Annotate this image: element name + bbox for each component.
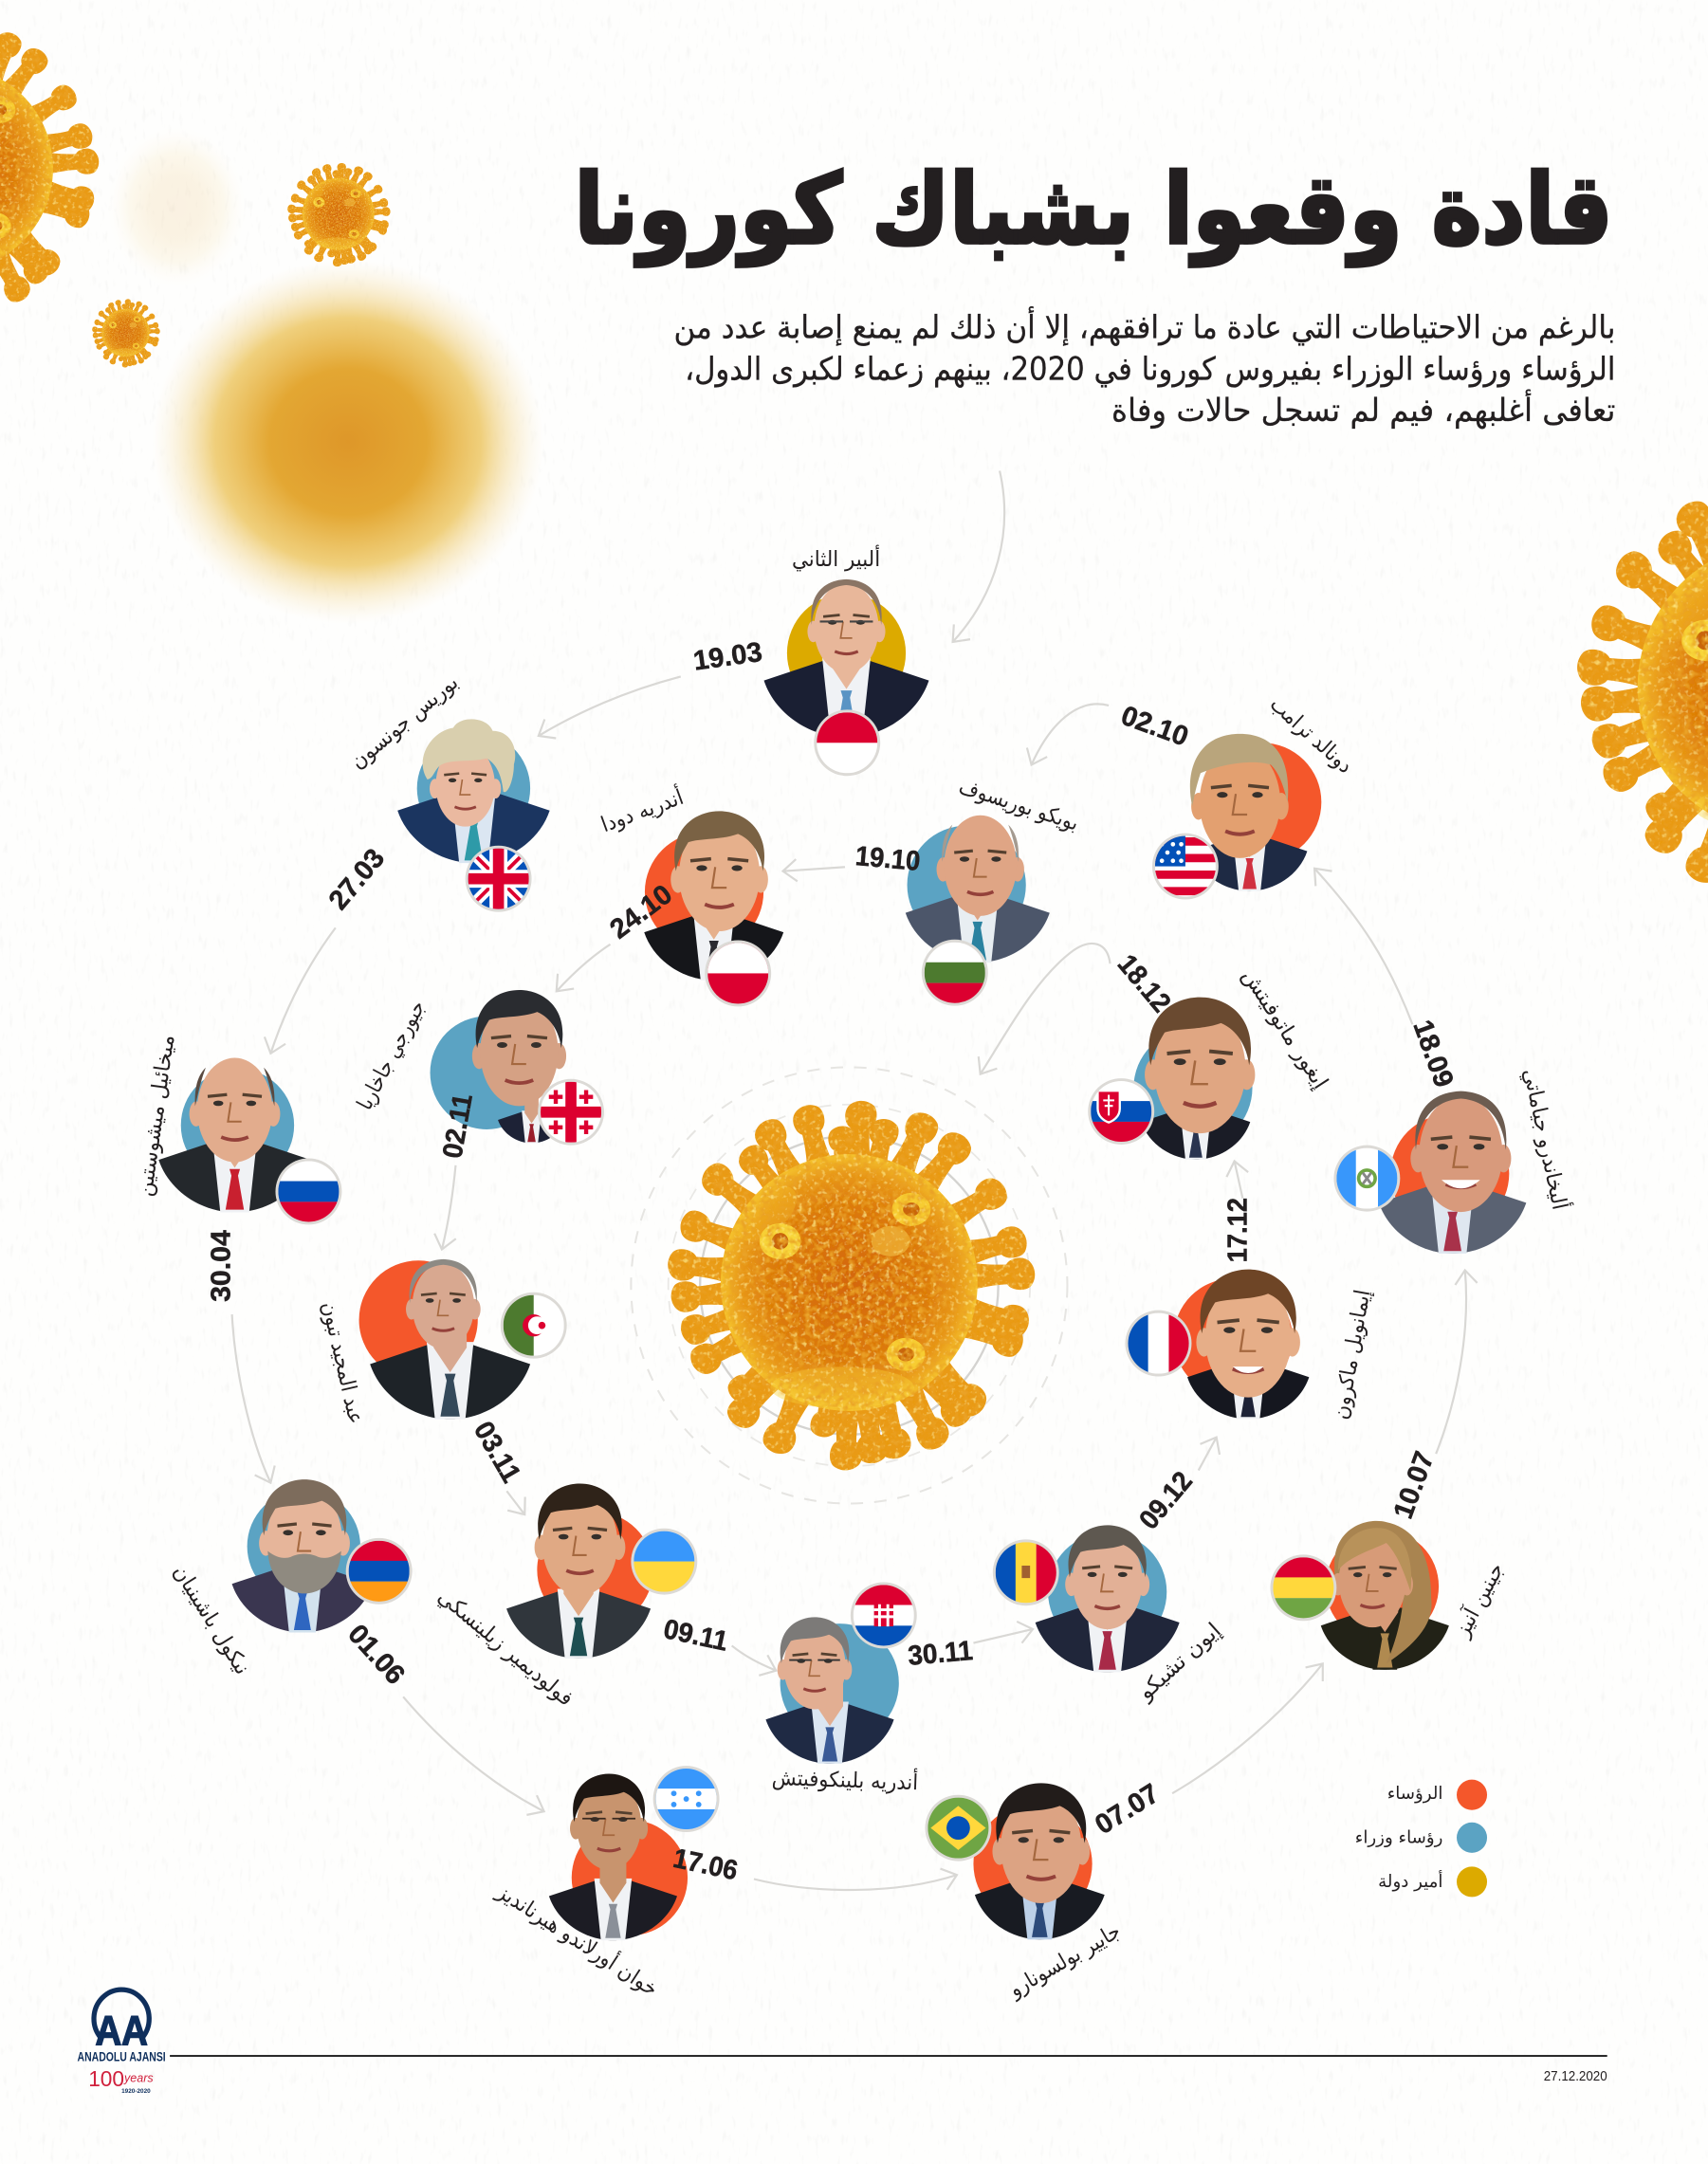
flag: Monaco: [814, 709, 880, 776]
person: Boyko Borisov: [854, 774, 1082, 1006]
person: Abdelmadjid Tebboune: [317, 1259, 567, 1488]
arrows between dates: [232, 470, 1466, 1890]
flag: UK: [466, 846, 532, 912]
person: Donald Trump: [1122, 702, 1349, 899]
Anadolu logo: years: [123, 2071, 154, 2085]
person: Jeanine Anez: [1270, 1448, 1509, 1670]
name: ميخائيل ميشوستين: [133, 1034, 180, 1198]
blurred glow large: [152, 260, 544, 624]
virus: small top: [287, 163, 391, 266]
legend: الرؤساء: [1387, 1784, 1442, 1804]
date: 07.07: [1090, 1778, 1165, 1841]
date: 09.12: [1133, 1466, 1199, 1535]
flag: Moldova: [993, 1539, 1059, 1605]
date: 24.10: [605, 879, 678, 945]
flag: Georgia: [538, 1079, 604, 1146]
flag: Brazil: [925, 1795, 991, 1861]
Anadolu logo: [78, 1990, 166, 2095]
person: Boris Johnson: [323, 670, 550, 916]
flag: Algeria: [501, 1293, 567, 1359]
date: 09.11: [661, 1614, 730, 1658]
footer rule: [170, 2055, 1607, 2057]
name: ألبير الثاني: [792, 544, 880, 572]
flag: Ukraine: [631, 1529, 697, 1595]
flag: Bolivia: [1270, 1554, 1336, 1621]
Anadolu logo: 1920-2020: [121, 2088, 151, 2095]
name: عبد المجيد تبون: [317, 1299, 368, 1426]
person: Mikhail Mishustin: [133, 1034, 341, 1302]
person: Volodymyr Zelensky: [433, 1484, 730, 1712]
name: إيغور ماتوفيتش: [1237, 964, 1332, 1093]
person: Ion Chicu: [993, 1466, 1226, 1706]
date: 18.09: [1406, 1017, 1459, 1091]
date: 17.06: [670, 1843, 741, 1886]
person: Albert II: [691, 544, 928, 776]
name: أندريه دودا: [597, 782, 687, 837]
name: جايير بولسونارو: [1004, 1918, 1125, 2003]
date: 17.12: [1223, 1198, 1254, 1262]
name: نيكول باشينيان: [168, 1561, 254, 1679]
legend: رؤساء وزراء: [1355, 1828, 1442, 1848]
date: 19.10: [854, 841, 922, 877]
Anadolu logo: AA: [95, 2008, 148, 2054]
flag: Poland: [705, 940, 771, 1006]
date: 30.11: [907, 1636, 974, 1672]
date: 02.10: [1117, 701, 1192, 753]
Anadolu logo: 100: [88, 2066, 124, 2091]
virus: small left: [92, 299, 160, 368]
date: 30.04: [206, 1229, 236, 1302]
name: خوان أورلاندو هيرنانديز: [492, 1877, 664, 2002]
intro text: تعافى أغلبهم، فيم لم تسجل حالات وفاة: [1111, 389, 1615, 429]
name: إيمانويل ماكرون: [1329, 1288, 1375, 1421]
person: Emmanuel Macron: [1126, 1198, 1375, 1421]
person: Jair Bolsonaro: [925, 1778, 1165, 2003]
flag: Russia: [275, 1159, 341, 1224]
date: 01.06: [341, 1619, 411, 1691]
flag: Bulgaria: [922, 940, 988, 1006]
name: إيون تشيكو: [1132, 1618, 1226, 1706]
name: بوريس جونسون: [346, 670, 463, 774]
virus: top left large: [0, 22, 100, 319]
person: Nikol Pashinyan: [168, 1479, 413, 1691]
virus: right large: [1574, 479, 1708, 902]
intro text: [674, 306, 1615, 429]
flag: France: [1126, 1311, 1191, 1377]
date: 10.07: [1388, 1448, 1441, 1523]
intro text: الرؤساء ورؤساء الوزراء بفيروس كورونا في 2020، بينهم زعماء لكبرى الدول،: [685, 350, 1615, 387]
name: أندريه بلينكوفيتش: [771, 1763, 919, 1795]
flag: USA: [1152, 834, 1219, 900]
Anadolu logo: ANADOLU AJANSI: [78, 2049, 166, 2064]
person: Alejandro Giammattei: [1333, 1017, 1574, 1254]
person: Giorgi Gakharia: [353, 990, 604, 1161]
flag: Slovakia: [1088, 1078, 1154, 1145]
name: أليخاندرو جياماتي: [1518, 1066, 1574, 1212]
date: 27.03: [323, 843, 391, 916]
date: 03.11: [468, 1417, 526, 1488]
date: 19.03: [691, 637, 764, 677]
name: جينين آنيز: [1448, 1558, 1509, 1641]
person: Juan Orlando Hernandez: [492, 1766, 741, 2002]
blurred glow small: [108, 127, 246, 287]
legend: [1355, 1780, 1487, 1897]
flag: Guatemala: [1333, 1146, 1400, 1212]
intro text: بالرغم من الاحتياطات التي عادة ما ترافقهم، إلا أن ذلك لم يمنع إصابة عدد من: [674, 306, 1615, 347]
legend: أمير دولة: [1378, 1870, 1442, 1892]
flag: Honduras: [653, 1766, 720, 1832]
name: دونالد ترامب: [1265, 692, 1357, 779]
date: 18.12: [1111, 949, 1176, 1018]
person: Andrej Plenkovic: [765, 1582, 974, 1795]
person: Igor Matovic: [1088, 949, 1332, 1160]
center virus with rings: [631, 1067, 1067, 1503]
flag: Croatia: [851, 1582, 917, 1648]
person: Andrzej Duda: [597, 782, 783, 1006]
flag: Armenia: [346, 1538, 413, 1605]
date: 02.11: [437, 1091, 479, 1161]
footer date: 27.12.2020: [1544, 2069, 1607, 2084]
name: بويكو بوريسوف: [956, 774, 1082, 836]
name: فولوديمير زيلينسكي: [433, 1585, 578, 1712]
name: جيورجي جاخاريا: [353, 997, 431, 1114]
